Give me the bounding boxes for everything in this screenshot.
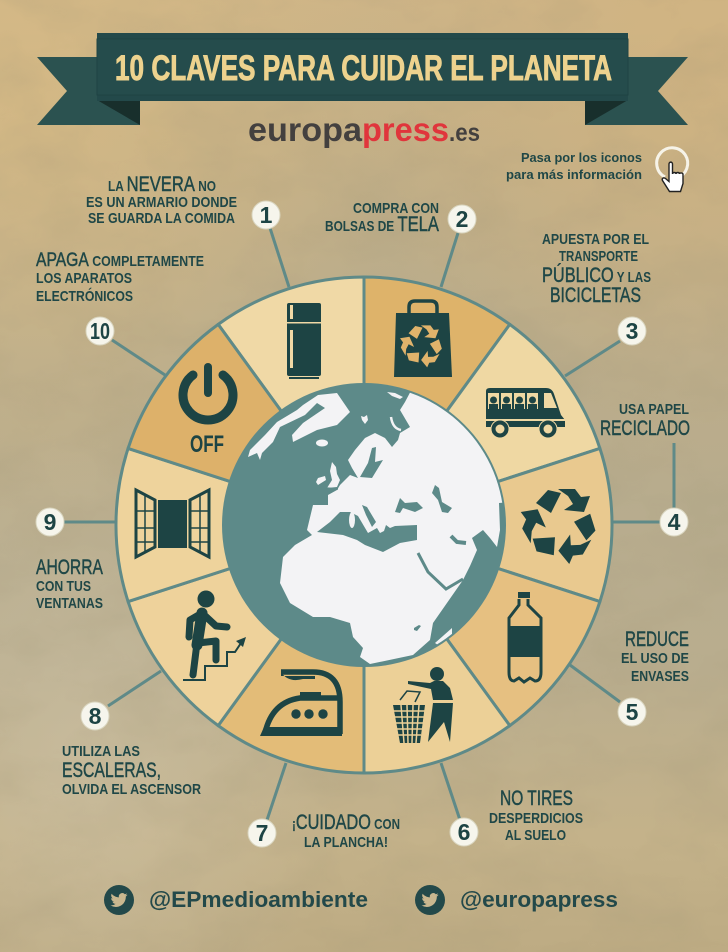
number badges: 6 [458, 819, 470, 845]
text: key 9: VENTANAS [36, 595, 103, 612]
off label: OFF [190, 431, 224, 458]
icon: hand cursor in ring [657, 148, 688, 192]
text: key 6: AL SUELO [505, 827, 566, 844]
number badges: 5 [626, 699, 639, 725]
text: key 8: UTILIZA LAS [62, 743, 140, 760]
text: key 4: USA PAPEL [619, 401, 689, 418]
footer: twitter account 2 [415, 885, 618, 915]
segment 2 [364, 277, 510, 525]
globe [222, 383, 506, 667]
number badges: 2 [456, 206, 468, 232]
footer: twitter account 1 [104, 885, 368, 915]
logo: europapress.es: europa [248, 111, 363, 148]
text: key 3: PÚBLICO Y LAS [542, 264, 651, 287]
text: key 10: LOS APARATOS [36, 270, 132, 287]
logo: europapress.es: press [362, 111, 449, 148]
text: key 5 [621, 628, 689, 685]
text: key 10 [36, 250, 204, 305]
text: key 8 [62, 743, 201, 798]
text: key 5: ENVASES [631, 668, 689, 685]
segment 9 [116, 448, 364, 602]
connector lines [64, 228, 674, 820]
text: key 7: ¡CUIDADO CON [292, 811, 400, 834]
segment 10 [128, 324, 364, 525]
icon: bus [486, 388, 565, 438]
text: key 2 [325, 200, 439, 236]
footer: twitter account 1: @EPmedioambiente [149, 887, 368, 912]
segment 5 [364, 525, 600, 726]
text: key 8: OLVIDA EL ASCENSOR [62, 781, 201, 798]
footer: twitter account 2: @europapress [460, 887, 618, 912]
segment 6 [364, 525, 510, 773]
icon: bottle [508, 592, 542, 682]
text: key 2: COMPRA CON [353, 200, 439, 217]
number badges: 10 [90, 318, 110, 344]
hint text: para más información [506, 167, 642, 182]
hint text [506, 150, 642, 182]
text: key 1: ES UN ARMARIO DONDE [86, 194, 237, 211]
text: key 6: DESPERDICIOS [489, 810, 583, 827]
segment 3 [364, 324, 600, 525]
icon: person littering in bin [393, 667, 453, 743]
text: key 3: BICICLETAS [550, 284, 641, 307]
number badges: 7 [256, 820, 268, 846]
number badges: 1 [260, 202, 273, 228]
segment 4 [364, 448, 612, 602]
text: key 4 [600, 401, 690, 440]
logo: europapress.es: .es [449, 119, 480, 147]
segment 1 [218, 277, 364, 525]
text: key 3: APUESTA POR EL [542, 231, 649, 248]
text: key 3: TRANSPORTE [559, 248, 638, 265]
icon: bag with recycle symbol [394, 301, 452, 377]
text: key 5: EL USO DE [621, 650, 689, 667]
hint text: Pasa por los iconos [521, 150, 642, 165]
text: key 1 [86, 173, 237, 227]
number badges [36, 201, 688, 847]
logo: europapress.es [248, 111, 480, 148]
title banner [37, 33, 688, 125]
text: key 2: BOLSAS DE TELA [325, 213, 439, 236]
icon: recycle [515, 489, 602, 567]
text: key 6 [489, 787, 583, 844]
icon: fridge [287, 303, 321, 379]
number badges: 3 [626, 318, 638, 344]
text: key 3 [542, 231, 651, 307]
text: key 9 [36, 556, 103, 612]
number badges: 9 [44, 509, 56, 535]
text: key 9: CON TUS [36, 578, 91, 595]
text: key 4: RECICLADO [600, 417, 690, 440]
text: key 7 [292, 811, 400, 851]
segment 8 [128, 525, 364, 726]
wheel of ten segments [116, 277, 612, 773]
number badges: 4 [668, 509, 681, 535]
text: key 10: ELECTRÓNICOS [36, 287, 133, 305]
text: key 5: REDUCE [625, 628, 689, 651]
text: key 10: APAGA COMPLETAMENTE [36, 250, 204, 271]
text: key 6: NO TIRES [500, 787, 573, 810]
text: key 8: ESCALERAS, [62, 759, 161, 782]
text: key 1: SE GUARDA LA COMIDA [88, 210, 235, 227]
icon: open window [136, 490, 209, 557]
number badges: 8 [89, 703, 102, 729]
icon: iron [260, 672, 342, 736]
icon: person climbing stairs [183, 590, 246, 680]
text: key 1: LA NEVERA NO [108, 173, 216, 196]
icon: power off [183, 367, 233, 458]
segment 7 [218, 525, 364, 773]
text: key 9: AHORRA [36, 556, 103, 579]
text: key 7: LA PLANCHA! [304, 834, 388, 851]
